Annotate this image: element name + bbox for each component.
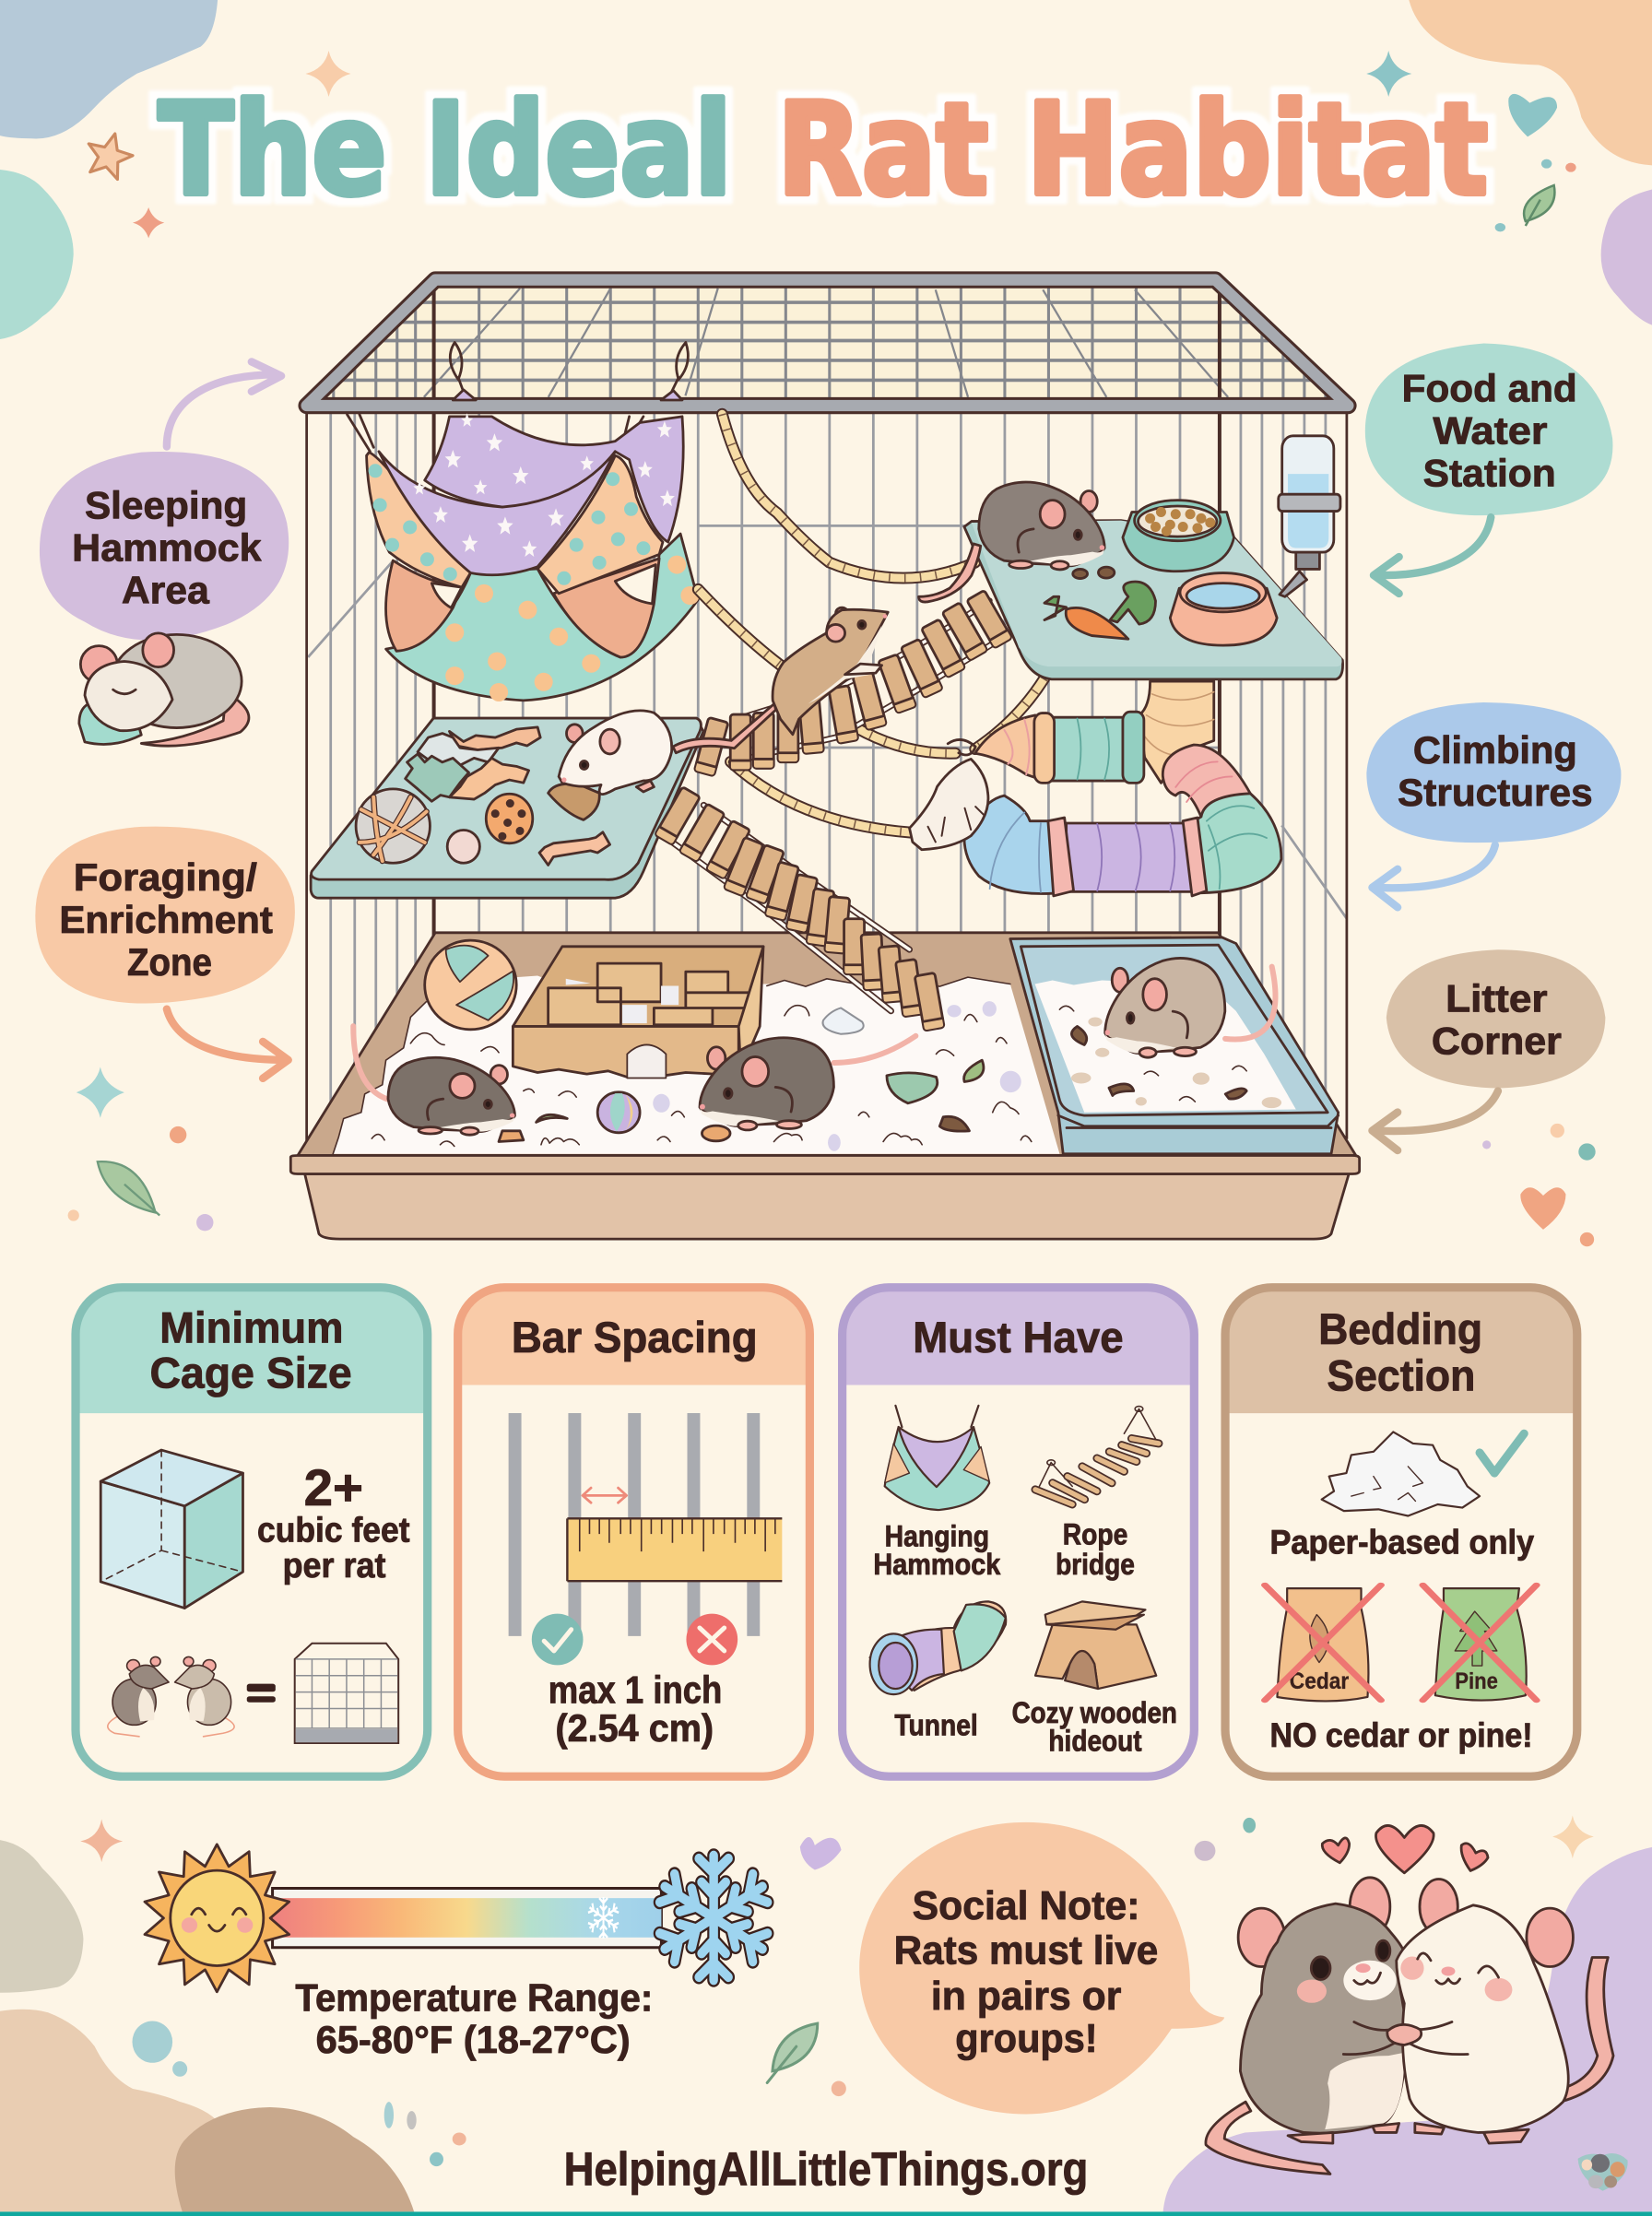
- upper rope bridge and lower ladder: [655, 590, 1012, 1031]
- temperature text: [295, 1977, 653, 2061]
- cream rat: [1397, 1879, 1573, 2143]
- panel: bar spacing: (2.54 cm): [555, 1707, 714, 1750]
- panel: bedding section: Pine: [1455, 1669, 1498, 1694]
- leaf scraps and treats: [887, 1073, 938, 1103]
- label: litter corner: Litter: [1446, 978, 1548, 1020]
- social note bubble: groups!: [955, 2016, 1098, 2061]
- paper shreds: [449, 727, 540, 749]
- hooks: [348, 342, 688, 452]
- panel: minimum cage size: [76, 1288, 428, 1776]
- bars, ruler and marks: [509, 1413, 782, 1665]
- panel: must have: Hammock: [873, 1548, 1000, 1581]
- label: food and water: [1365, 344, 1612, 515]
- panel: minimum cage size: per rat: [283, 1546, 386, 1585]
- hammock: [348, 342, 698, 701]
- top decorations: [133, 51, 1576, 238]
- tray rim and front: [305, 1173, 1349, 1239]
- temperature text: 65-80°F (18-27°C): [316, 2019, 631, 2061]
- cube icon: [100, 1450, 242, 1609]
- arrow: litter corner: [1372, 1091, 1498, 1150]
- panel: bar spacing: Bar Spacing: [512, 1314, 758, 1362]
- cuddling rat couple: [1206, 1825, 1613, 2174]
- social note bubble: Rats must live: [894, 1927, 1158, 1973]
- cedar bag: [1277, 1588, 1368, 1701]
- panel: bedding section: Cedar: [1290, 1669, 1350, 1694]
- label: foraging zone: Enrichment: [59, 899, 273, 941]
- bedding flecks: [372, 1006, 1032, 1146]
- small snowflake: [587, 1897, 620, 1939]
- social note bubble: in pairs or: [931, 1974, 1121, 2019]
- stars: [413, 413, 675, 557]
- ladder rails: [664, 805, 910, 1011]
- small logo: [1578, 2153, 1628, 2191]
- label: sleeping hammock area: Sleeping: [85, 485, 247, 527]
- pair of rats equals cage: [108, 1644, 398, 1743]
- label: climbing structures: Structures: [1398, 772, 1593, 814]
- arrow: foraging zone: [167, 1009, 289, 1079]
- wicker ball: [356, 789, 430, 863]
- label: sleeping hammock area: Area: [122, 570, 210, 612]
- pine bag: [1435, 1588, 1527, 1701]
- cookie toy: [486, 794, 533, 843]
- arrow: sleeping area: [167, 361, 281, 446]
- label: litter corner: Corner: [1432, 1020, 1562, 1063]
- panel: minimum cage size: 2+: [304, 1459, 363, 1516]
- litter box: [1010, 937, 1339, 1154]
- white rat with food: [549, 711, 672, 819]
- label: litter corner: [1386, 949, 1605, 1089]
- panel: bar spacing: max 1 inch: [549, 1668, 722, 1711]
- bedding: [333, 975, 1059, 1154]
- water bottle: [1279, 436, 1340, 596]
- food bowl: [1123, 501, 1234, 572]
- cage posts: [307, 287, 1347, 1152]
- bone toy: [539, 832, 610, 865]
- panel: bedding section: Section: [1327, 1352, 1475, 1401]
- arrow: food station: [1374, 517, 1491, 594]
- panel: bar spacing: [458, 1288, 809, 1776]
- hanging white rat: [910, 759, 988, 850]
- panel: minimum cage size: Minimum: [159, 1304, 344, 1353]
- arrow: climbing: [1372, 845, 1495, 907]
- temperature bar: [145, 1845, 661, 1992]
- purple front layer: [379, 452, 615, 575]
- teal bottom layer: [386, 534, 698, 701]
- tails: [1206, 2102, 1330, 2174]
- label: climbing structures: Climbing: [1413, 729, 1577, 772]
- label: climbing structures: [1366, 702, 1621, 843]
- paper pile icon: [1322, 1432, 1480, 1516]
- base tray with bedding: [290, 933, 1360, 1239]
- bridge rails: [731, 601, 1005, 762]
- star decoration: [82, 128, 137, 182]
- grey rat at food shelf: [979, 482, 1104, 570]
- panel: must have: bridge: [1056, 1548, 1135, 1581]
- panel: must have: hideout: [1048, 1725, 1142, 1758]
- ladder planks: [655, 787, 700, 845]
- back purple layer: [425, 417, 683, 542]
- check mark: [1480, 1433, 1524, 1473]
- wooden maze: [513, 947, 763, 1078]
- hammock mini icon: [885, 1406, 989, 1510]
- bottom decorations: [80, 1819, 842, 2166]
- panel: bedding section: NO cedar or pine!: [1269, 1716, 1533, 1754]
- label: foraging zone: Foraging/: [74, 856, 258, 899]
- title: The Ideal: [159, 76, 732, 224]
- panel: minimum cage size: Cage Size: [149, 1350, 352, 1398]
- label: food and water: Food and: [1402, 367, 1577, 409]
- temperature text: Temperature Range:: [295, 1977, 653, 2020]
- water bowl: [1170, 573, 1277, 645]
- hearts: [1322, 1825, 1488, 1873]
- title: Rat Habitat: [777, 76, 1488, 224]
- cage roof grid: [328, 288, 1328, 397]
- panel: bedding section: Paper-based only: [1269, 1524, 1535, 1562]
- food shelf: [919, 436, 1343, 679]
- pink ball: [447, 831, 479, 863]
- tube system: [964, 681, 1281, 896]
- label: food and water: Station: [1423, 452, 1556, 494]
- panel: bedding section: [1225, 1288, 1577, 1776]
- red crosses: [1265, 1585, 1537, 1701]
- panel: must have: Tunnel: [894, 1709, 978, 1742]
- label: foraging zone: Zone: [127, 941, 212, 984]
- mid decorations: [68, 1067, 1596, 1246]
- snowflake icon: [657, 1856, 770, 1980]
- social note bubble: [859, 1822, 1224, 2114]
- rope knot and tails: [948, 739, 975, 755]
- panel: minimum cage size: cubic feet: [257, 1511, 410, 1550]
- striped toy ball: [597, 1092, 640, 1133]
- panel: must have: [843, 1288, 1194, 1776]
- label: sleeping hammock area: Hammock: [72, 527, 263, 570]
- sun icon: [145, 1845, 289, 1992]
- panel: must have: Must Have: [913, 1314, 1124, 1362]
- hideout mini icon: [1035, 1601, 1156, 1689]
- peach flaps: [367, 453, 470, 587]
- foraging platform: [311, 711, 703, 898]
- cage roof frame: [307, 280, 1348, 406]
- panel: must have: Hanging: [885, 1519, 989, 1552]
- ropes: [698, 414, 1044, 832]
- icon: sleeping rat: [79, 633, 249, 746]
- hamster ball: [425, 940, 516, 1030]
- label: sleeping hammock area: [40, 452, 289, 641]
- grey rat: [1238, 1878, 1407, 2143]
- floor rats and tails: [353, 958, 1276, 1135]
- title: [159, 76, 1488, 224]
- label: food and water: Water: [1433, 409, 1548, 452]
- website url: HelpingAllLittleThings.org: [564, 2142, 1088, 2195]
- bridge planks: [967, 590, 1012, 648]
- panel: must have: Cozy wooden: [1012, 1696, 1177, 1729]
- label: foraging zone: [35, 827, 295, 1004]
- rope bridge mini icon: [1035, 1407, 1159, 1504]
- pellets, carrot and broccoli: [1044, 567, 1156, 639]
- social note bubble: Social Note:: [913, 1883, 1139, 1928]
- clasped paws: [1343, 2022, 1468, 2055]
- tunnel mini icon: [870, 1601, 1006, 1694]
- grey rat tail: [919, 544, 981, 602]
- cage back wall bars: [308, 413, 1347, 1116]
- panel: bedding section: Bedding: [1318, 1305, 1482, 1354]
- climbing tan rat: [773, 607, 888, 735]
- panel: must have: Rope: [1063, 1518, 1127, 1551]
- social decorations: [832, 1815, 1594, 2096]
